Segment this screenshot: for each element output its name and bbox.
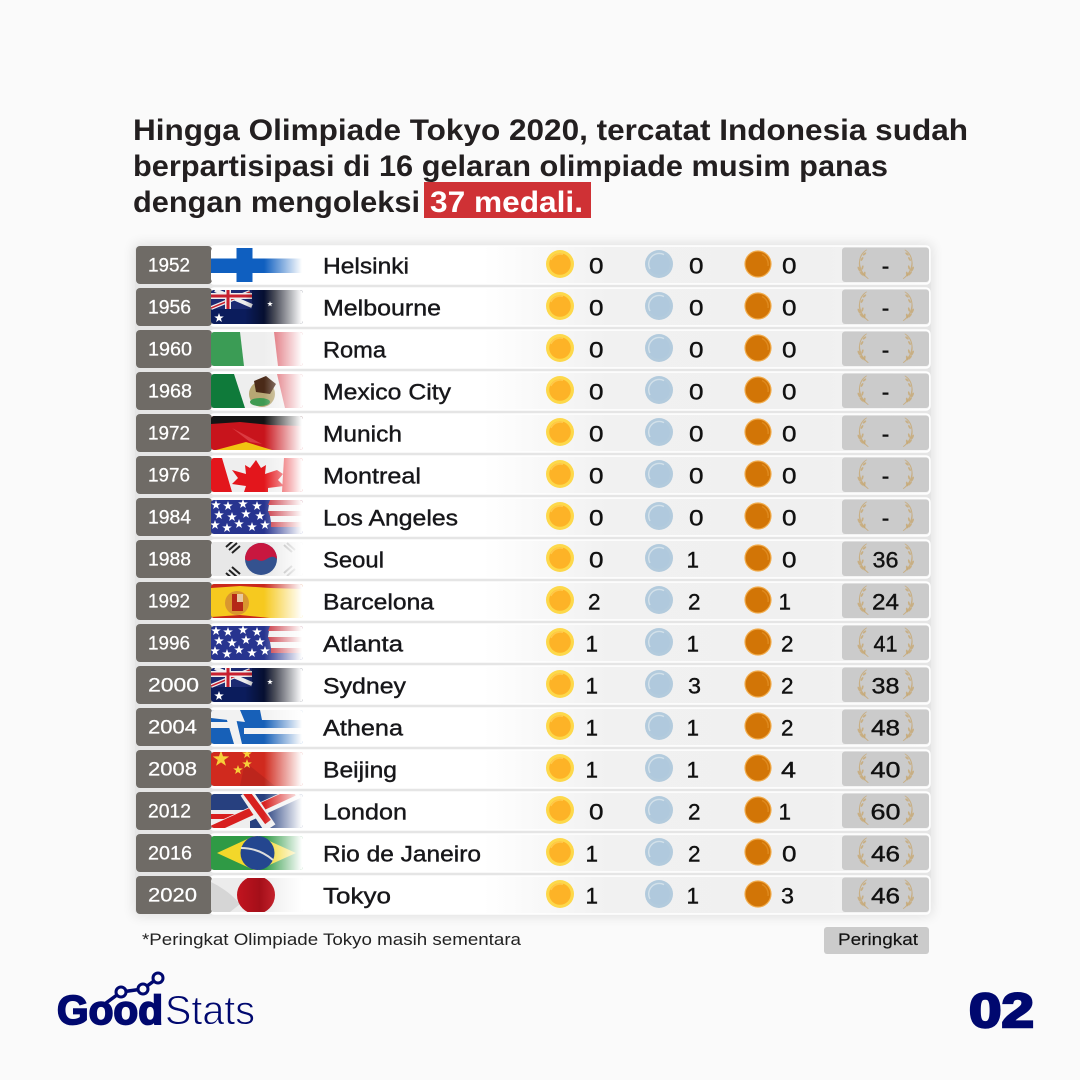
silver	[645, 754, 699, 782]
silver	[645, 376, 704, 404]
city: Montreal	[323, 464, 421, 488]
year: 1988	[148, 550, 191, 570]
gold	[546, 880, 598, 908]
bronze: 2	[781, 632, 794, 656]
year: 2004	[148, 718, 197, 738]
rank	[842, 458, 929, 492]
flag: South Korea	[211, 542, 296, 576]
gold	[546, 712, 598, 740]
year: 1968	[148, 382, 192, 402]
bronze	[744, 670, 794, 698]
bronze	[744, 754, 796, 782]
gold	[546, 502, 604, 530]
year: 1972	[148, 424, 190, 444]
city: Mexico City	[323, 380, 452, 404]
silver: 0	[689, 380, 704, 404]
gold	[546, 670, 598, 698]
rank: 60	[870, 800, 900, 824]
bronze	[744, 544, 796, 572]
bronze: 3	[781, 884, 794, 908]
year: 1960	[148, 340, 192, 360]
rank: 46	[871, 884, 900, 908]
gold: 1	[586, 842, 598, 866]
rank	[842, 668, 929, 702]
gold	[546, 838, 598, 866]
rank	[842, 794, 929, 828]
rank: -	[882, 464, 889, 488]
rank	[842, 248, 929, 282]
city: Athena	[323, 716, 404, 740]
bronze: 0	[782, 422, 796, 446]
row: 1952 Helsinki	[136, 246, 930, 284]
gold: 0	[589, 296, 604, 320]
rank	[842, 416, 929, 450]
gold	[546, 334, 604, 362]
bronze	[744, 880, 794, 908]
silver	[645, 292, 704, 320]
row: 1960 Roma	[136, 330, 930, 368]
row: 2008 Beijing	[136, 749, 930, 788]
rank	[842, 878, 929, 912]
year: 2016	[148, 844, 192, 864]
silver	[645, 796, 700, 824]
table shadow	[134, 244, 932, 916]
bronze: 2	[781, 674, 794, 698]
year	[136, 498, 212, 536]
logo: GoodStats: Good	[57, 987, 163, 1033]
rank: -	[882, 506, 889, 530]
rank	[842, 500, 929, 534]
rank	[842, 752, 929, 786]
gold	[546, 628, 598, 656]
legend: Peringkat	[824, 927, 929, 954]
silver	[645, 880, 699, 908]
year	[136, 246, 212, 284]
year: 2000	[148, 676, 199, 696]
year	[136, 414, 212, 452]
flag: Spain	[211, 584, 303, 618]
rank: 46	[871, 842, 900, 866]
bronze	[744, 250, 796, 278]
city: Atlanta	[323, 632, 404, 656]
year	[136, 540, 212, 578]
gold: 0	[589, 254, 604, 278]
gold: 0	[589, 422, 604, 446]
logo icon: trend line	[106, 973, 163, 1003]
bronze: 0	[782, 506, 796, 530]
legend: Peringkat: Peringkat	[838, 931, 918, 949]
silver	[645, 334, 704, 362]
flag: Finland	[211, 248, 303, 282]
bronze: 0	[782, 464, 796, 488]
silver: 1	[686, 758, 699, 782]
row: 2020 Tokyo	[136, 876, 930, 914]
row: 2012 London	[136, 792, 930, 832]
rank: 40	[870, 758, 900, 782]
gold: 0	[589, 380, 604, 404]
silver: 0	[689, 296, 704, 320]
rank: 24	[872, 590, 899, 614]
flag: Australia	[211, 290, 303, 324]
silver	[645, 544, 699, 572]
silver: 0	[689, 422, 704, 446]
city: Tokyo	[323, 884, 391, 908]
city: Rio de Janeiro	[323, 842, 481, 866]
rank: -	[882, 254, 889, 278]
gold: 1	[586, 632, 598, 656]
year: 2012	[148, 802, 191, 822]
silver: 1	[686, 548, 699, 572]
silver	[645, 838, 700, 866]
silver	[645, 586, 700, 614]
flag: USA	[210, 625, 303, 660]
row: 1976 Montreal	[136, 456, 930, 494]
flag: Germany	[211, 416, 303, 450]
gold: 0	[589, 800, 604, 824]
gold	[546, 460, 604, 488]
silver	[645, 628, 699, 656]
bronze	[744, 838, 796, 866]
silver: 2	[688, 590, 700, 614]
silver: 3	[688, 674, 701, 698]
flag: Australia	[211, 668, 303, 702]
title: dengan mengoleksi	[133, 186, 420, 219]
gold: 0	[589, 548, 604, 572]
year	[136, 792, 212, 830]
city: Roma	[323, 338, 386, 362]
city: Barcelona	[323, 590, 435, 614]
gold	[546, 250, 604, 278]
year	[136, 624, 212, 662]
rank: 41	[874, 632, 898, 656]
silver: 0	[689, 338, 704, 362]
bronze	[744, 712, 794, 740]
silver	[645, 418, 704, 446]
row: 1968 Mexico City	[136, 372, 930, 410]
row: 2004 Athena	[136, 708, 930, 746]
year: 1984	[148, 508, 191, 528]
rank	[842, 374, 929, 408]
silver: 0	[689, 506, 704, 530]
bronze	[744, 334, 796, 362]
rank: -	[882, 296, 889, 320]
bronze: 0	[782, 296, 796, 320]
footnote: *Peringkat Olimpiade Tokyo masih sementara	[142, 931, 522, 949]
bronze	[744, 460, 796, 488]
silver	[645, 712, 699, 740]
row: 1996 Atlanta	[136, 624, 930, 662]
bronze	[744, 292, 796, 320]
year	[136, 834, 212, 872]
city: London	[323, 800, 407, 824]
silver	[645, 250, 704, 278]
row: 1972 Munich	[136, 414, 930, 452]
gold: 2	[588, 590, 600, 614]
row: 2016 Rio de Janeiro	[136, 834, 930, 872]
year: 1956	[148, 298, 191, 318]
title: berpartisipasi di 16 gelaran olimpiade musim panas	[133, 150, 888, 183]
silver: 2	[688, 800, 700, 824]
page number: 02	[969, 985, 1034, 1038]
flag: China	[211, 749, 303, 786]
flag: Greece	[211, 710, 303, 744]
city: Seoul	[323, 548, 384, 572]
city: Beijing	[323, 758, 397, 782]
rank: -	[882, 380, 889, 404]
row: 1956 Melbourne	[136, 288, 930, 326]
gold: 0	[589, 338, 604, 362]
silver: 0	[689, 254, 704, 278]
gold	[546, 586, 600, 614]
gold: 1	[586, 884, 598, 908]
year: 1952	[148, 256, 190, 276]
year: 1992	[148, 592, 190, 612]
bronze: 0	[782, 254, 796, 278]
year	[136, 708, 212, 746]
gold	[546, 796, 604, 824]
highlight: 37 medali: 37 medali.	[430, 186, 583, 219]
city: Helsinki	[323, 254, 409, 278]
rank: 48	[871, 716, 900, 740]
silver: 1	[686, 632, 699, 656]
city: Munich	[323, 422, 402, 446]
gold: 0	[589, 506, 604, 530]
rank	[842, 836, 929, 870]
bronze: 0	[782, 338, 796, 362]
bronze: 2	[781, 716, 794, 740]
bronze: 0	[782, 842, 796, 866]
logo: GoodStats: Stats	[165, 987, 255, 1033]
year: 1976	[148, 466, 190, 486]
gold	[546, 292, 604, 320]
bronze	[744, 586, 791, 614]
year	[136, 582, 212, 620]
flag: Canada	[211, 458, 303, 492]
rank: -	[882, 422, 889, 446]
gold	[546, 544, 604, 572]
bronze	[744, 376, 796, 404]
rank	[842, 710, 929, 744]
city: Sydney	[323, 674, 407, 698]
title: Hingga Olimpiade Tokyo 2020, tercatat Indonesia sudah	[133, 114, 968, 147]
table backing	[135, 246, 931, 914]
city: Los Angeles	[323, 506, 458, 530]
gold	[546, 376, 604, 404]
rank	[842, 542, 929, 576]
flag: United Kingdom	[211, 794, 303, 828]
row: 2000 Sydney	[136, 666, 930, 704]
year: 2008	[148, 760, 197, 780]
silver	[645, 670, 701, 698]
flag: USA	[210, 499, 303, 534]
rank	[842, 290, 929, 324]
flag: Italy	[211, 332, 303, 366]
bronze: 1	[778, 590, 791, 614]
gold: 0	[589, 464, 604, 488]
bronze	[744, 418, 796, 446]
year	[136, 330, 212, 368]
rank	[842, 626, 929, 660]
gold	[546, 418, 604, 446]
silver	[645, 502, 704, 530]
logo: GoodStats	[57, 973, 255, 1033]
row: 1984 Los Angeles	[136, 498, 930, 536]
year	[136, 876, 212, 914]
year: 2020	[148, 886, 197, 906]
table	[135, 246, 931, 914]
bronze	[744, 796, 791, 824]
year	[136, 456, 212, 494]
rank: -	[882, 338, 889, 362]
flag: Brazil	[211, 835, 303, 871]
bronze: 0	[782, 548, 796, 572]
rank: 36	[872, 548, 898, 572]
gold: 1	[586, 758, 598, 782]
bronze	[744, 502, 796, 530]
row: 1988 Seoul	[136, 540, 930, 580]
silver	[645, 460, 704, 488]
silver: 1	[686, 884, 699, 908]
silver: 2	[688, 842, 700, 866]
rank: 38	[872, 674, 900, 698]
year: 1996	[148, 634, 190, 654]
title	[133, 114, 968, 219]
gold	[546, 754, 598, 782]
bronze	[744, 628, 794, 656]
gold: 1	[586, 674, 598, 698]
year	[136, 666, 212, 704]
row: 1992 Barcelona	[136, 582, 930, 620]
silver: 1	[686, 716, 699, 740]
bronze: 4	[781, 758, 796, 782]
gold: 1	[586, 716, 598, 740]
flag: Japan	[211, 878, 286, 912]
year	[136, 288, 212, 326]
city: Melbourne	[323, 296, 441, 320]
rank	[842, 584, 929, 618]
year	[136, 750, 212, 788]
rank	[842, 332, 929, 366]
silver: 0	[689, 464, 704, 488]
flag: Mexico	[211, 374, 303, 408]
bronze: 1	[778, 800, 791, 824]
bronze: 0	[782, 380, 796, 404]
year	[136, 372, 212, 410]
